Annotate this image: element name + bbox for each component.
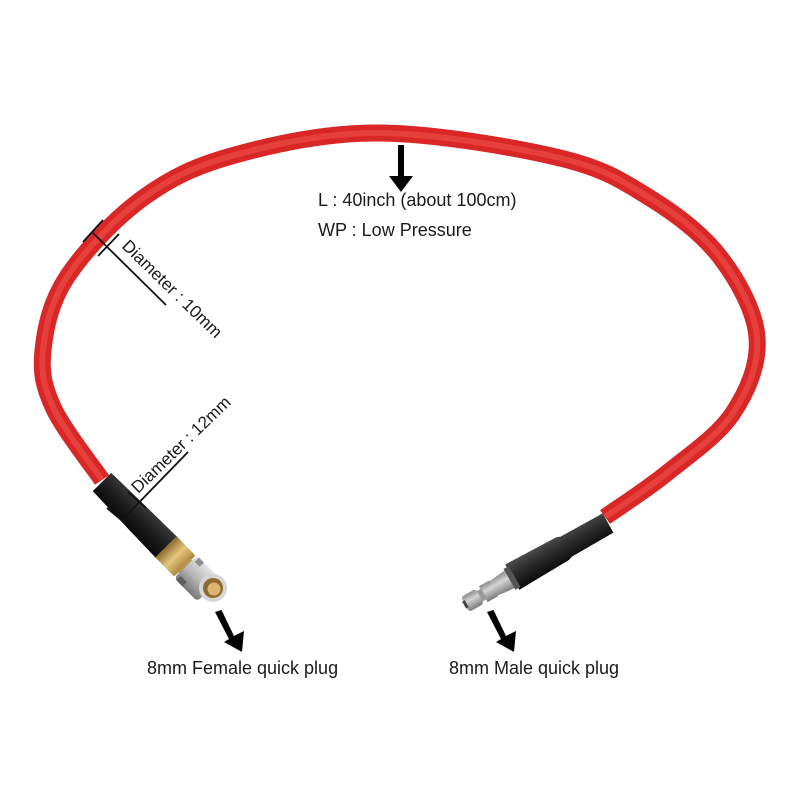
black sleeve, female side bbox=[91, 471, 177, 558]
arrow: length bbox=[389, 145, 413, 192]
diameter 10mm label: Diameter : 10mm bbox=[118, 236, 227, 342]
diameter 12mm label: Diameter : 12mm bbox=[128, 393, 235, 497]
red braided hose bbox=[42, 133, 757, 517]
length label: L : 40inch (about 100cm) bbox=[318, 190, 516, 210]
working pressure label: WP : Low Pressure bbox=[318, 220, 472, 240]
steel coupler bbox=[174, 555, 220, 601]
female plug label: 8mm Female quick plug bbox=[147, 658, 338, 678]
male plug label: 8mm Male quick plug bbox=[449, 658, 619, 678]
female connector bbox=[91, 471, 227, 602]
diameter 10mm marker bbox=[83, 220, 166, 305]
arrow: male plug bbox=[487, 610, 516, 652]
brass hex nut bbox=[155, 536, 200, 581]
male connector bbox=[458, 510, 615, 616]
coupler opening bbox=[199, 574, 227, 602]
black sleeve, male side bbox=[505, 510, 615, 590]
diameter 12mm marker bbox=[107, 452, 188, 523]
arrow: female plug bbox=[215, 610, 244, 652]
steel plug bbox=[458, 566, 521, 616]
